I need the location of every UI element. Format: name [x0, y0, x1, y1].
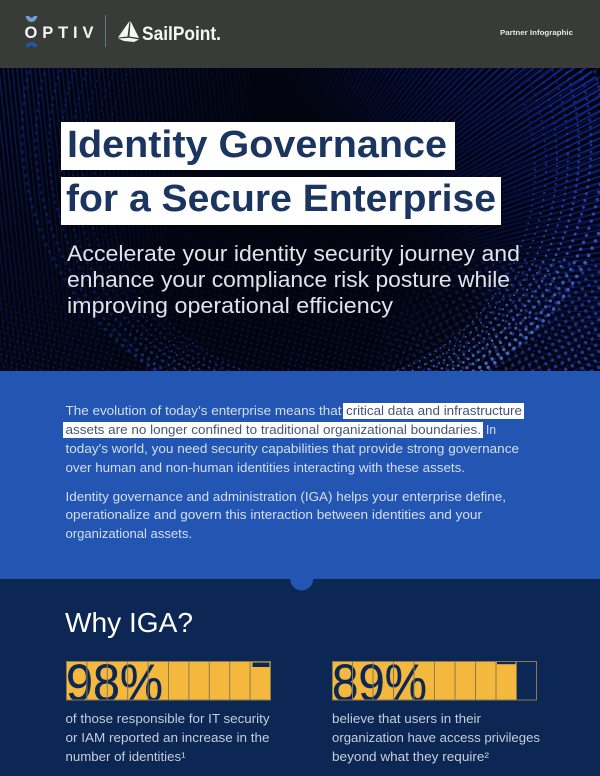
intro paragraph two: organizational assets. [66, 526, 192, 541]
intro paragraph one: today's world, you need security capabilities that provide strong governance [66, 441, 519, 456]
description 98: of those responsible for IT security [66, 711, 270, 726]
highlighted text background [63, 403, 524, 438]
intro paragraph one: The evolution of today’s enterprise means that [66, 403, 342, 418]
description 89: beyond what they require² [332, 749, 490, 764]
gauge cells 98 [66, 662, 270, 700]
connector half circle [290, 579, 313, 590]
logo: SailPoint [118, 21, 221, 45]
intro panel [0, 371, 600, 590]
gauge fill 89 [332, 661, 517, 700]
header bar [0, 0, 600, 68]
number 98%: 98% [66, 654, 163, 712]
logo: Optiv: OPTIV [24, 24, 94, 42]
description 89 [332, 711, 540, 764]
subtitle: Accelerate your identity security journey and [67, 241, 520, 266]
intro paragraph one: In [486, 422, 496, 437]
description 89: believe that users in their [332, 711, 482, 726]
gauge cells 89 [332, 662, 536, 700]
title: Identity Governance [67, 124, 447, 166]
logo: Optiv [24, 16, 94, 47]
hero panel [0, 68, 600, 371]
subtitle [67, 241, 520, 318]
partner label: Partner Infographic [500, 28, 573, 37]
subtitle: improving operational efficiency [67, 293, 394, 318]
stat: 98 percent [66, 654, 271, 764]
gauge fill 98 [66, 661, 271, 700]
hero background image: fibres and dots [0, 68, 600, 371]
title: for a Secure Enterprise [66, 178, 496, 220]
description 89: organization have access privileges [332, 730, 540, 745]
description 98: or IAM reported an increase in the [66, 730, 270, 745]
number 89%: 89% [332, 654, 427, 712]
stat: 89 percent [332, 654, 540, 764]
heading: Why IGA?: Why IGA? [65, 607, 193, 638]
intro paragraph one: assets are no longer confined to traditional organizational boundaries. [66, 422, 481, 437]
divider between logos [105, 15, 106, 47]
intro paragraph one: critical data and infrastructure [346, 403, 522, 418]
description 98: number of identities¹ [66, 749, 186, 764]
intro paragraph two: Identity governance and administration (IGA) helps your enterprise define, [66, 489, 506, 504]
description 98 [66, 711, 270, 764]
logo: SailPoint: SailPoint. [142, 24, 221, 45]
intro paragraph one: over human and non-human identities interacting with these assets. [66, 460, 465, 475]
intro paragraph one [66, 403, 522, 475]
intro paragraph two: operationalize and govern this interaction between identities and your [66, 507, 483, 522]
intro paragraph two [66, 489, 506, 541]
subtitle: enhance your compliance risk posture while [67, 267, 510, 292]
title [61, 122, 501, 225]
